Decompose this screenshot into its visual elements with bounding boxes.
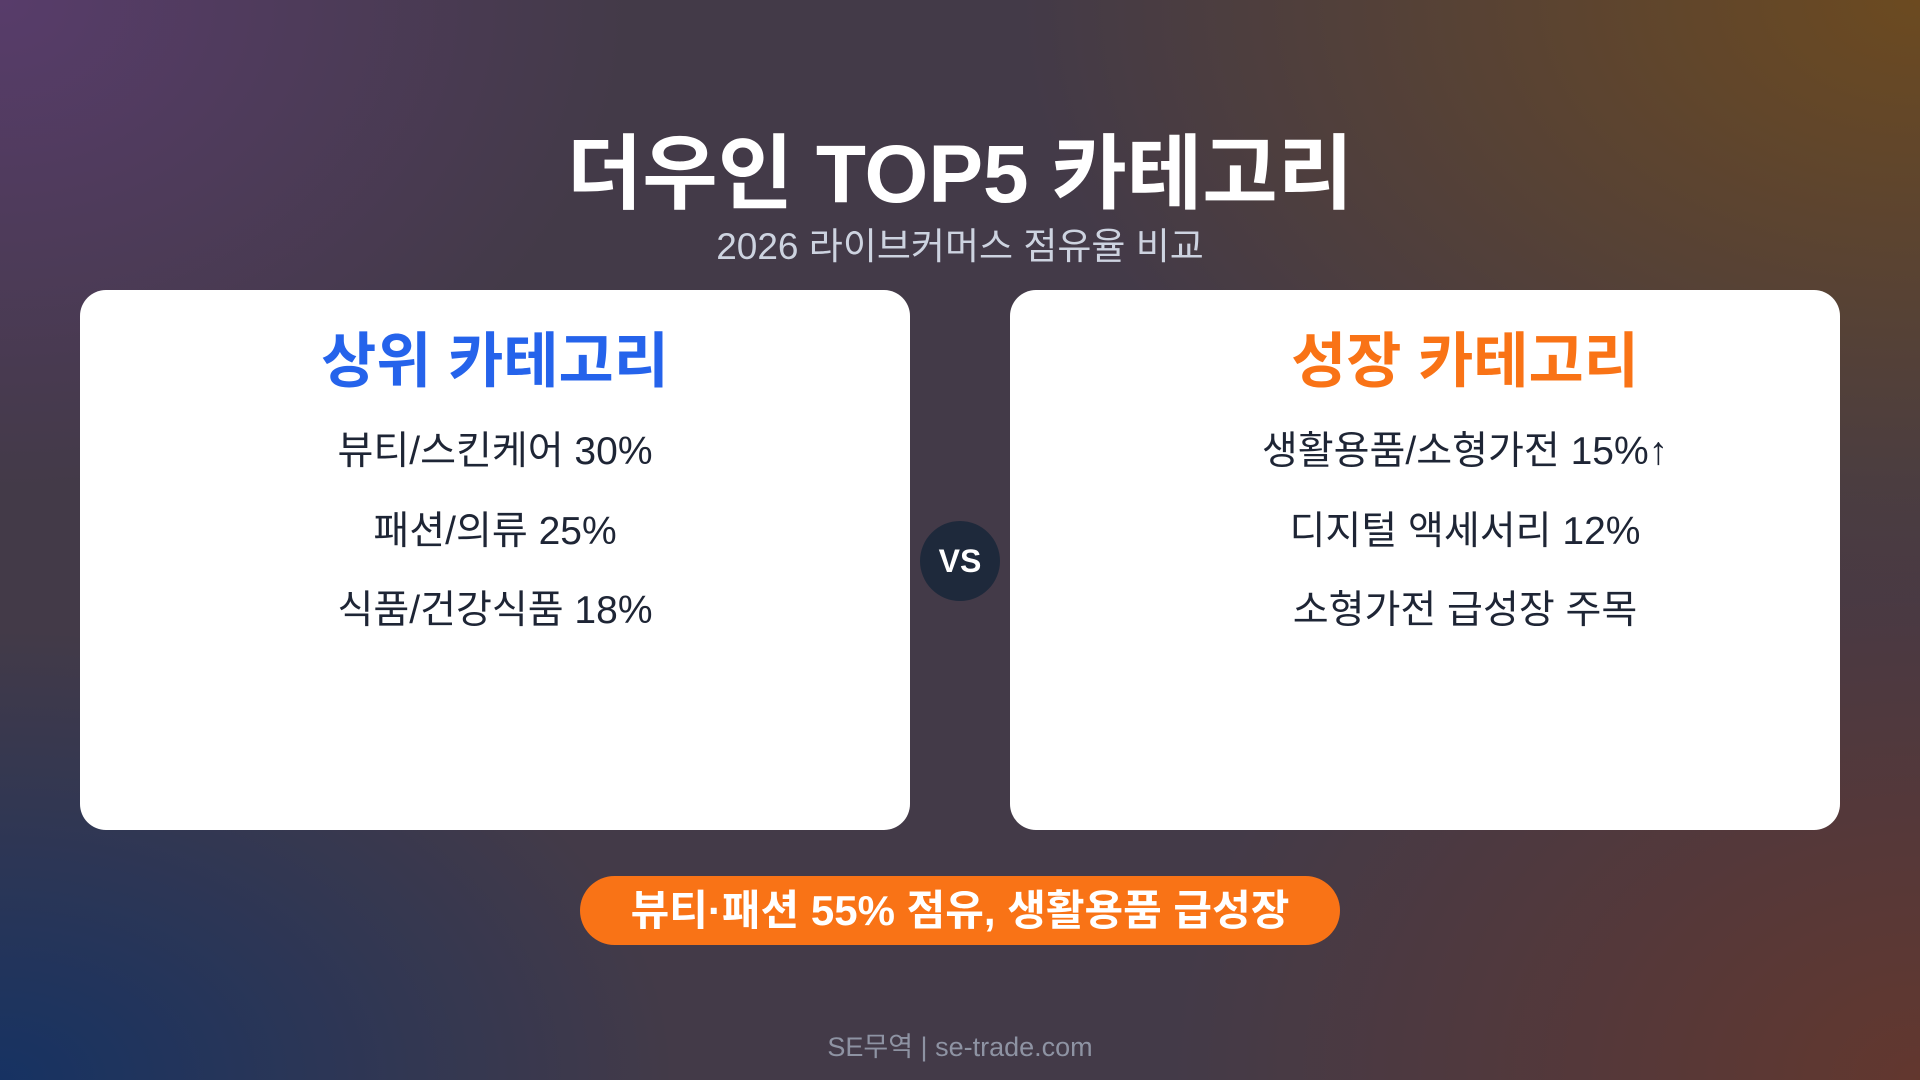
heading: growth categories: 성장 카테고리 bbox=[1291, 328, 1639, 395]
panel: growth categories bbox=[1010, 290, 1840, 830]
title: 더우인 TOP5 카테고리 bbox=[567, 129, 1353, 220]
panel: top categories bbox=[80, 290, 910, 830]
vs badge: VS bbox=[939, 543, 981, 579]
vs badge bbox=[920, 521, 1000, 601]
item list: 식품/건강식품 18% bbox=[337, 589, 652, 632]
subtitle: 2026 라이브커머스 점유율 비교 bbox=[716, 226, 1204, 267]
item list: 생활용품/소형가전 15%↑ bbox=[1262, 430, 1668, 473]
footer: SE무역 | se-trade.com bbox=[827, 1032, 1093, 1062]
item list: 소형가전 급성장 주목 bbox=[1293, 589, 1637, 632]
heading: top categories: 상위 카테고리 bbox=[321, 328, 669, 395]
callout: summary pill: 뷰티·패션 55% 점유, 생활용품 급성장 bbox=[631, 887, 1289, 934]
callout: summary pill bbox=[580, 876, 1340, 945]
item list bbox=[337, 430, 652, 632]
item list: 패션/의류 25% bbox=[373, 510, 617, 553]
item list: 뷰티/스킨케어 30% bbox=[337, 430, 652, 473]
item list: 디지털 액세서리 12% bbox=[1290, 510, 1640, 553]
item list bbox=[1262, 430, 1668, 632]
